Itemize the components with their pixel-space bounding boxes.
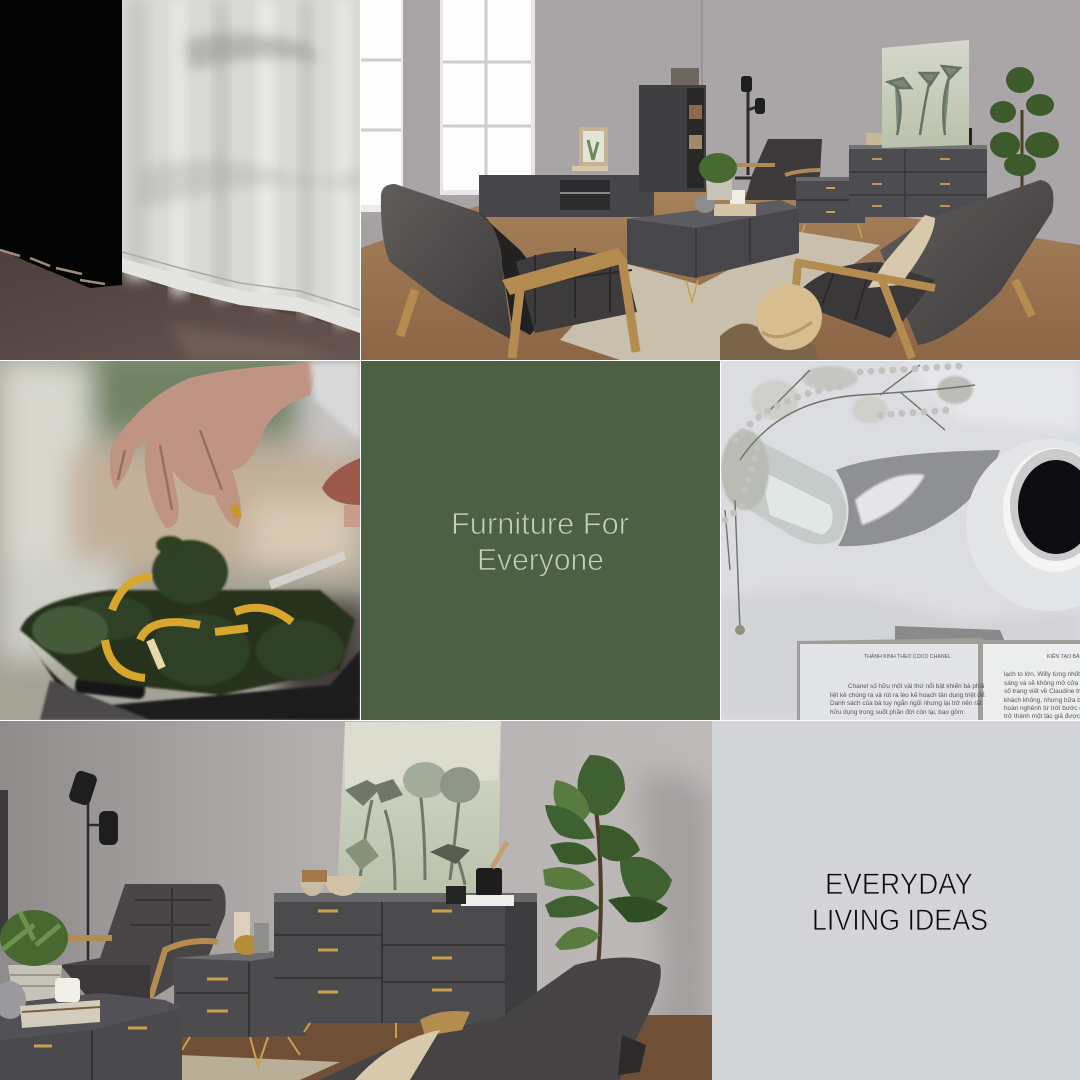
text: Everyday Living Ideas: EVERYDAY bbox=[825, 868, 973, 901]
floor lamp bbox=[68, 769, 118, 960]
blurred background bbox=[0, 350, 370, 720]
glass vase bbox=[725, 430, 846, 544]
armchair bbox=[60, 884, 226, 1000]
lemons bbox=[105, 505, 292, 678]
pan bbox=[20, 590, 360, 720]
nightstand bbox=[174, 912, 306, 1066]
potted plant bbox=[0, 910, 68, 1003]
fiddle leaf fig bbox=[543, 755, 672, 968]
coffee table bbox=[627, 190, 799, 302]
open book: liệt kê chúng ra và rút ra lèo kế hoạch tân dụng triệt để. bbox=[830, 690, 987, 699]
text: Everyday Living Ideas bbox=[812, 868, 988, 937]
text: Furniture For Everyone: Everyone bbox=[477, 542, 604, 577]
panel: bottom room photo bbox=[0, 721, 712, 1080]
side table bbox=[796, 177, 865, 238]
black curtain bbox=[0, 0, 122, 288]
floor bbox=[182, 1015, 712, 1080]
baby's breath flowers bbox=[721, 366, 973, 510]
painting bbox=[882, 40, 969, 148]
coffee cup bbox=[966, 439, 1080, 611]
windows bbox=[361, 0, 535, 212]
open book: THÀNH KINH THEO COCO CHANEL bbox=[864, 653, 951, 660]
dresser bbox=[849, 128, 987, 217]
coffee table with books bbox=[0, 978, 182, 1080]
panel: green title tile bbox=[361, 361, 720, 720]
tv console bbox=[479, 127, 654, 217]
right sofa bbox=[794, 180, 1054, 358]
dresser bbox=[274, 893, 537, 1038]
painting bbox=[337, 721, 501, 897]
hand bbox=[110, 362, 360, 528]
floor lamp bbox=[735, 76, 765, 178]
open book bbox=[797, 626, 1080, 720]
panel: curtains photo bbox=[0, 0, 360, 360]
greens bbox=[32, 536, 344, 686]
open book: Danh sách của bà tuy ngắn ngủi nhưng lại trở nên rất bbox=[830, 698, 982, 707]
shadow corner bbox=[701, 0, 703, 85]
tall cabinet bbox=[639, 68, 706, 192]
text: Everyday Living Ideas: LIVING IDEAS bbox=[812, 904, 988, 937]
spoon bbox=[270, 555, 345, 585]
panel: living room photo bbox=[361, 0, 1080, 360]
open book: Chanel số hữu một vài thứ nổi bật khiến bà phải bbox=[848, 681, 984, 690]
panel: coffee and book photo bbox=[721, 361, 1080, 720]
tableware on dresser bbox=[300, 842, 514, 906]
plant shadow on wall bbox=[640, 773, 712, 1040]
panel: food photo bbox=[0, 350, 370, 720]
fiddle leaf plant bbox=[990, 67, 1059, 190]
floor bbox=[361, 185, 1080, 360]
white sheer curtain bbox=[122, 0, 360, 333]
open book: hữu dụng trong suốt phần đời còn lại, bao gồm: bbox=[830, 707, 965, 716]
left armchair bbox=[381, 184, 637, 358]
vase shadow bbox=[836, 450, 1000, 546]
potted plant bbox=[699, 153, 737, 200]
text: Furniture For Everyone bbox=[451, 506, 629, 577]
panel: grey caption tile bbox=[712, 721, 1080, 1080]
light patches on carpet bbox=[176, 327, 312, 359]
carpet bbox=[42, 304, 360, 360]
back armchair bbox=[745, 139, 822, 200]
text: Furniture For Everyone: Furniture For bbox=[451, 506, 629, 541]
foreground sofa bbox=[320, 958, 661, 1080]
rug bbox=[560, 232, 880, 360]
basket and cushion bbox=[720, 284, 822, 360]
